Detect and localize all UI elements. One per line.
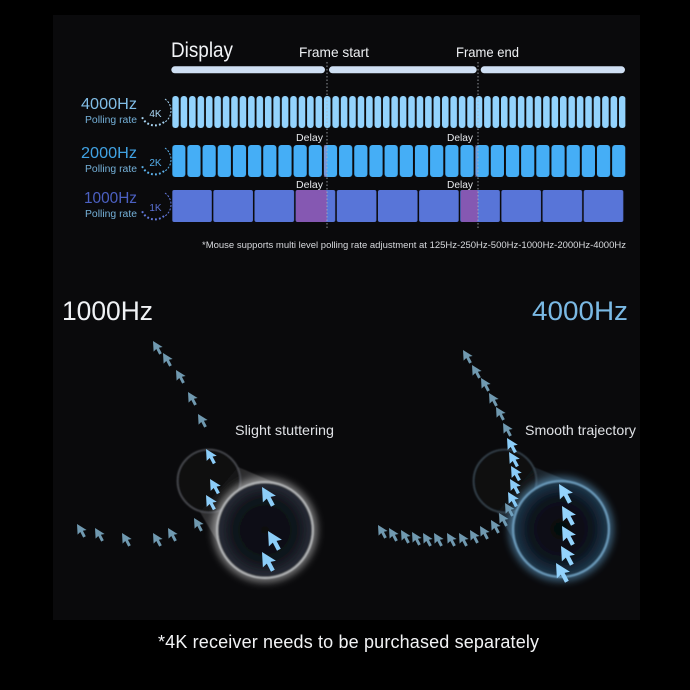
large cursors: [262, 487, 282, 572]
4000Hz heading: 4000Hz: [532, 296, 628, 326]
large lens: [513, 481, 609, 577]
2000Hz row label: Polling rate: [85, 164, 137, 175]
1000Hz row label: Polling rate: [85, 209, 137, 220]
1000Hz heading: 1000Hz: [62, 296, 153, 326]
panel: 1000Hz trajectory: [62, 296, 334, 578]
1K badge: [142, 193, 171, 219]
4000Hz row label: Polling rate: [85, 115, 137, 126]
frame boundary dotted lines: [327, 62, 478, 230]
footnote: polling levels: *Mouse supports multi level polling rate adjustment at 125Hz-250Hz-500Hz-1000Hz-2000Hz-4000Hz: [202, 240, 627, 250]
footnote: receiver: *4K receiver needs to be purchased separately: [158, 632, 539, 652]
2K badge: [142, 148, 171, 174]
2000Hz row label: [81, 145, 137, 175]
delay labels row 2: [296, 133, 473, 144]
panel: 4000Hz trajectory: [378, 296, 636, 583]
large lens: [217, 482, 313, 578]
frame end label: Frame end: [456, 44, 519, 60]
large lens glow: [217, 482, 313, 578]
large lens glow: [513, 481, 609, 577]
small lens ring: [178, 450, 240, 512]
display heading: Display: [171, 39, 233, 62]
bright cursors in small lens: [507, 438, 522, 507]
small lens ring: [474, 450, 536, 512]
delay labels row 2: Delay: [296, 133, 323, 144]
magnifier cone: [200, 467, 292, 560]
1000Hz row label: [84, 190, 137, 220]
timing diagram: [81, 39, 627, 250]
large cursors: [556, 484, 576, 583]
background panel: [53, 15, 640, 620]
dim cursors: [77, 341, 208, 547]
4K badge: [142, 99, 171, 125]
4000Hz polling bars: [172, 96, 625, 128]
2K badge: 2K: [149, 158, 162, 169]
1000Hz row label: 1000Hz: [84, 190, 137, 207]
delay labels row 3: [296, 180, 473, 191]
4000Hz row label: 4000Hz: [81, 96, 137, 113]
dim cursors: [378, 350, 515, 547]
slight stuttering label: Slight stuttering: [235, 422, 334, 438]
4000Hz row label: [81, 96, 137, 126]
delay labels row 3: Delay: [296, 180, 323, 191]
1000Hz polling bars with delay segments: [172, 190, 624, 222]
delay labels row 2: Delay: [447, 133, 473, 144]
1K badge: 1K: [149, 203, 162, 214]
bright cursors in small lens: [206, 449, 221, 510]
delay labels row 3: Delay: [447, 180, 473, 191]
2000Hz polling bars: [172, 145, 625, 177]
frame start label: Frame start: [299, 44, 369, 60]
smooth trajectory label: Smooth trajectory: [525, 422, 636, 438]
2000Hz row label: 2000Hz: [81, 145, 137, 162]
magnifier cone: [497, 467, 590, 558]
4K badge: 4K: [149, 109, 162, 120]
display frame bars: [171, 66, 625, 73]
